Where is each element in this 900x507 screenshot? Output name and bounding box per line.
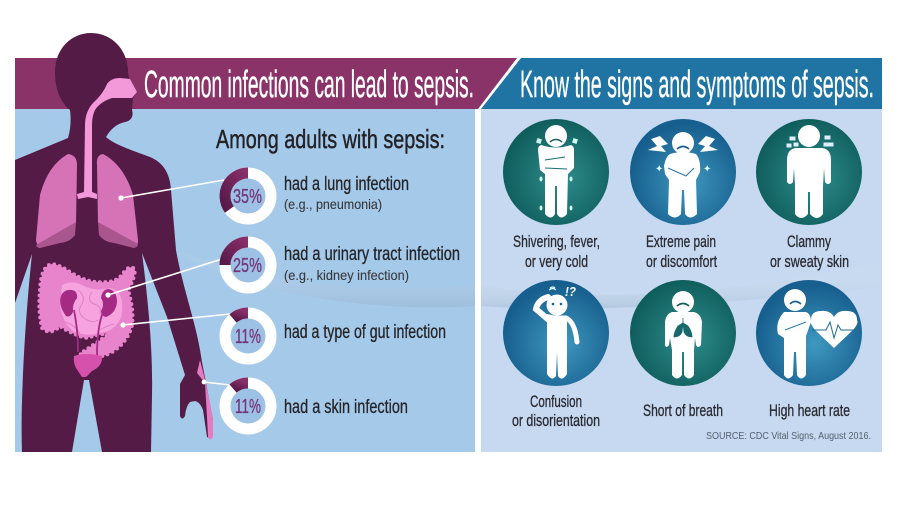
large intestine [39, 264, 135, 357]
panel: symptoms background [481, 109, 882, 452]
left kidney [60, 290, 77, 316]
icon: short of breath [630, 280, 736, 386]
right lung lower lobe [98, 222, 138, 248]
label: shivering: Shivering, fever, [513, 232, 600, 251]
label: gut infection: had a type of gut infection [284, 321, 446, 343]
icon: clammy skin [756, 119, 862, 225]
label: clammy: Clammy [787, 232, 831, 251]
donut 11% gut: 11% [235, 325, 261, 348]
intestine folds [66, 290, 114, 334]
label: lung infection: had a lung infection [284, 173, 409, 195]
banner: symptoms [481, 58, 882, 109]
icon: high heart rate [756, 280, 862, 386]
donut 35% [225, 173, 271, 219]
label: clammy [770, 232, 849, 271]
label: extreme pain: or discomfort [646, 252, 717, 271]
airway [77, 78, 137, 199]
icon: confusion [503, 280, 609, 386]
icon: confusion: !? [565, 284, 576, 299]
label: urinary infection: (e.g., kidney infection) [284, 267, 409, 283]
label: short of breath: Short of breath [643, 401, 723, 420]
label: urinary infection: had a urinary tract infection [284, 243, 460, 265]
connector: lung [118, 180, 224, 201]
body silhouette [15, 33, 213, 452]
label: confusion [512, 392, 600, 430]
right kidney [101, 289, 117, 317]
label: confusion: Confusion [530, 392, 582, 411]
label: shivering: or very cold [525, 252, 588, 271]
right lung [97, 154, 138, 247]
connector: gut [120, 314, 230, 328]
label: shivering [513, 232, 600, 271]
left lung lower lobe [36, 222, 76, 248]
label: skin infection: had a skin infection [284, 396, 408, 418]
skin patch on hand [197, 360, 213, 439]
connector: skin [202, 380, 230, 385]
left lung [36, 154, 77, 247]
connector: kidney [105, 259, 222, 298]
icon: extreme pain [630, 119, 736, 225]
label: extreme pain [646, 232, 717, 271]
banner: infections [15, 58, 517, 109]
icon: extreme pain: ✦ [655, 164, 663, 175]
decorative swoosh left [175, 248, 475, 307]
label: high heart rate: High heart rate [769, 401, 850, 420]
label: urinary infection [284, 243, 460, 283]
donut 25% [225, 242, 271, 288]
donut 11% gut [225, 313, 271, 359]
heading: infections banner title: Common infections can lead to sepsis. [144, 64, 474, 106]
donut 11% skin [225, 383, 271, 429]
bladder [74, 354, 102, 377]
ureters [74, 310, 103, 355]
donut 25%: 25% [233, 254, 262, 277]
icon: shivering [503, 119, 609, 225]
label: lung infection [284, 173, 409, 212]
label: lung infection: (e.g., pneumonia) [284, 196, 382, 212]
label: confusion: or disorientation [512, 411, 600, 430]
source note: SOURCE: CDC Vital Signs, August 2016. [706, 430, 871, 442]
human body figure [15, 33, 213, 452]
donut 35%: 35% [233, 185, 262, 208]
icon: extreme pain: ✦ [703, 164, 711, 175]
small intestine [60, 282, 122, 335]
subheading: Among adults with sepsis: [216, 124, 445, 154]
panel: infections background [15, 109, 475, 452]
decorative swoosh right [481, 262, 882, 309]
donut 11% skin: 11% [235, 395, 261, 418]
label: clammy: or sweaty skin [770, 252, 849, 271]
label: extreme pain: Extreme pain [646, 232, 716, 251]
